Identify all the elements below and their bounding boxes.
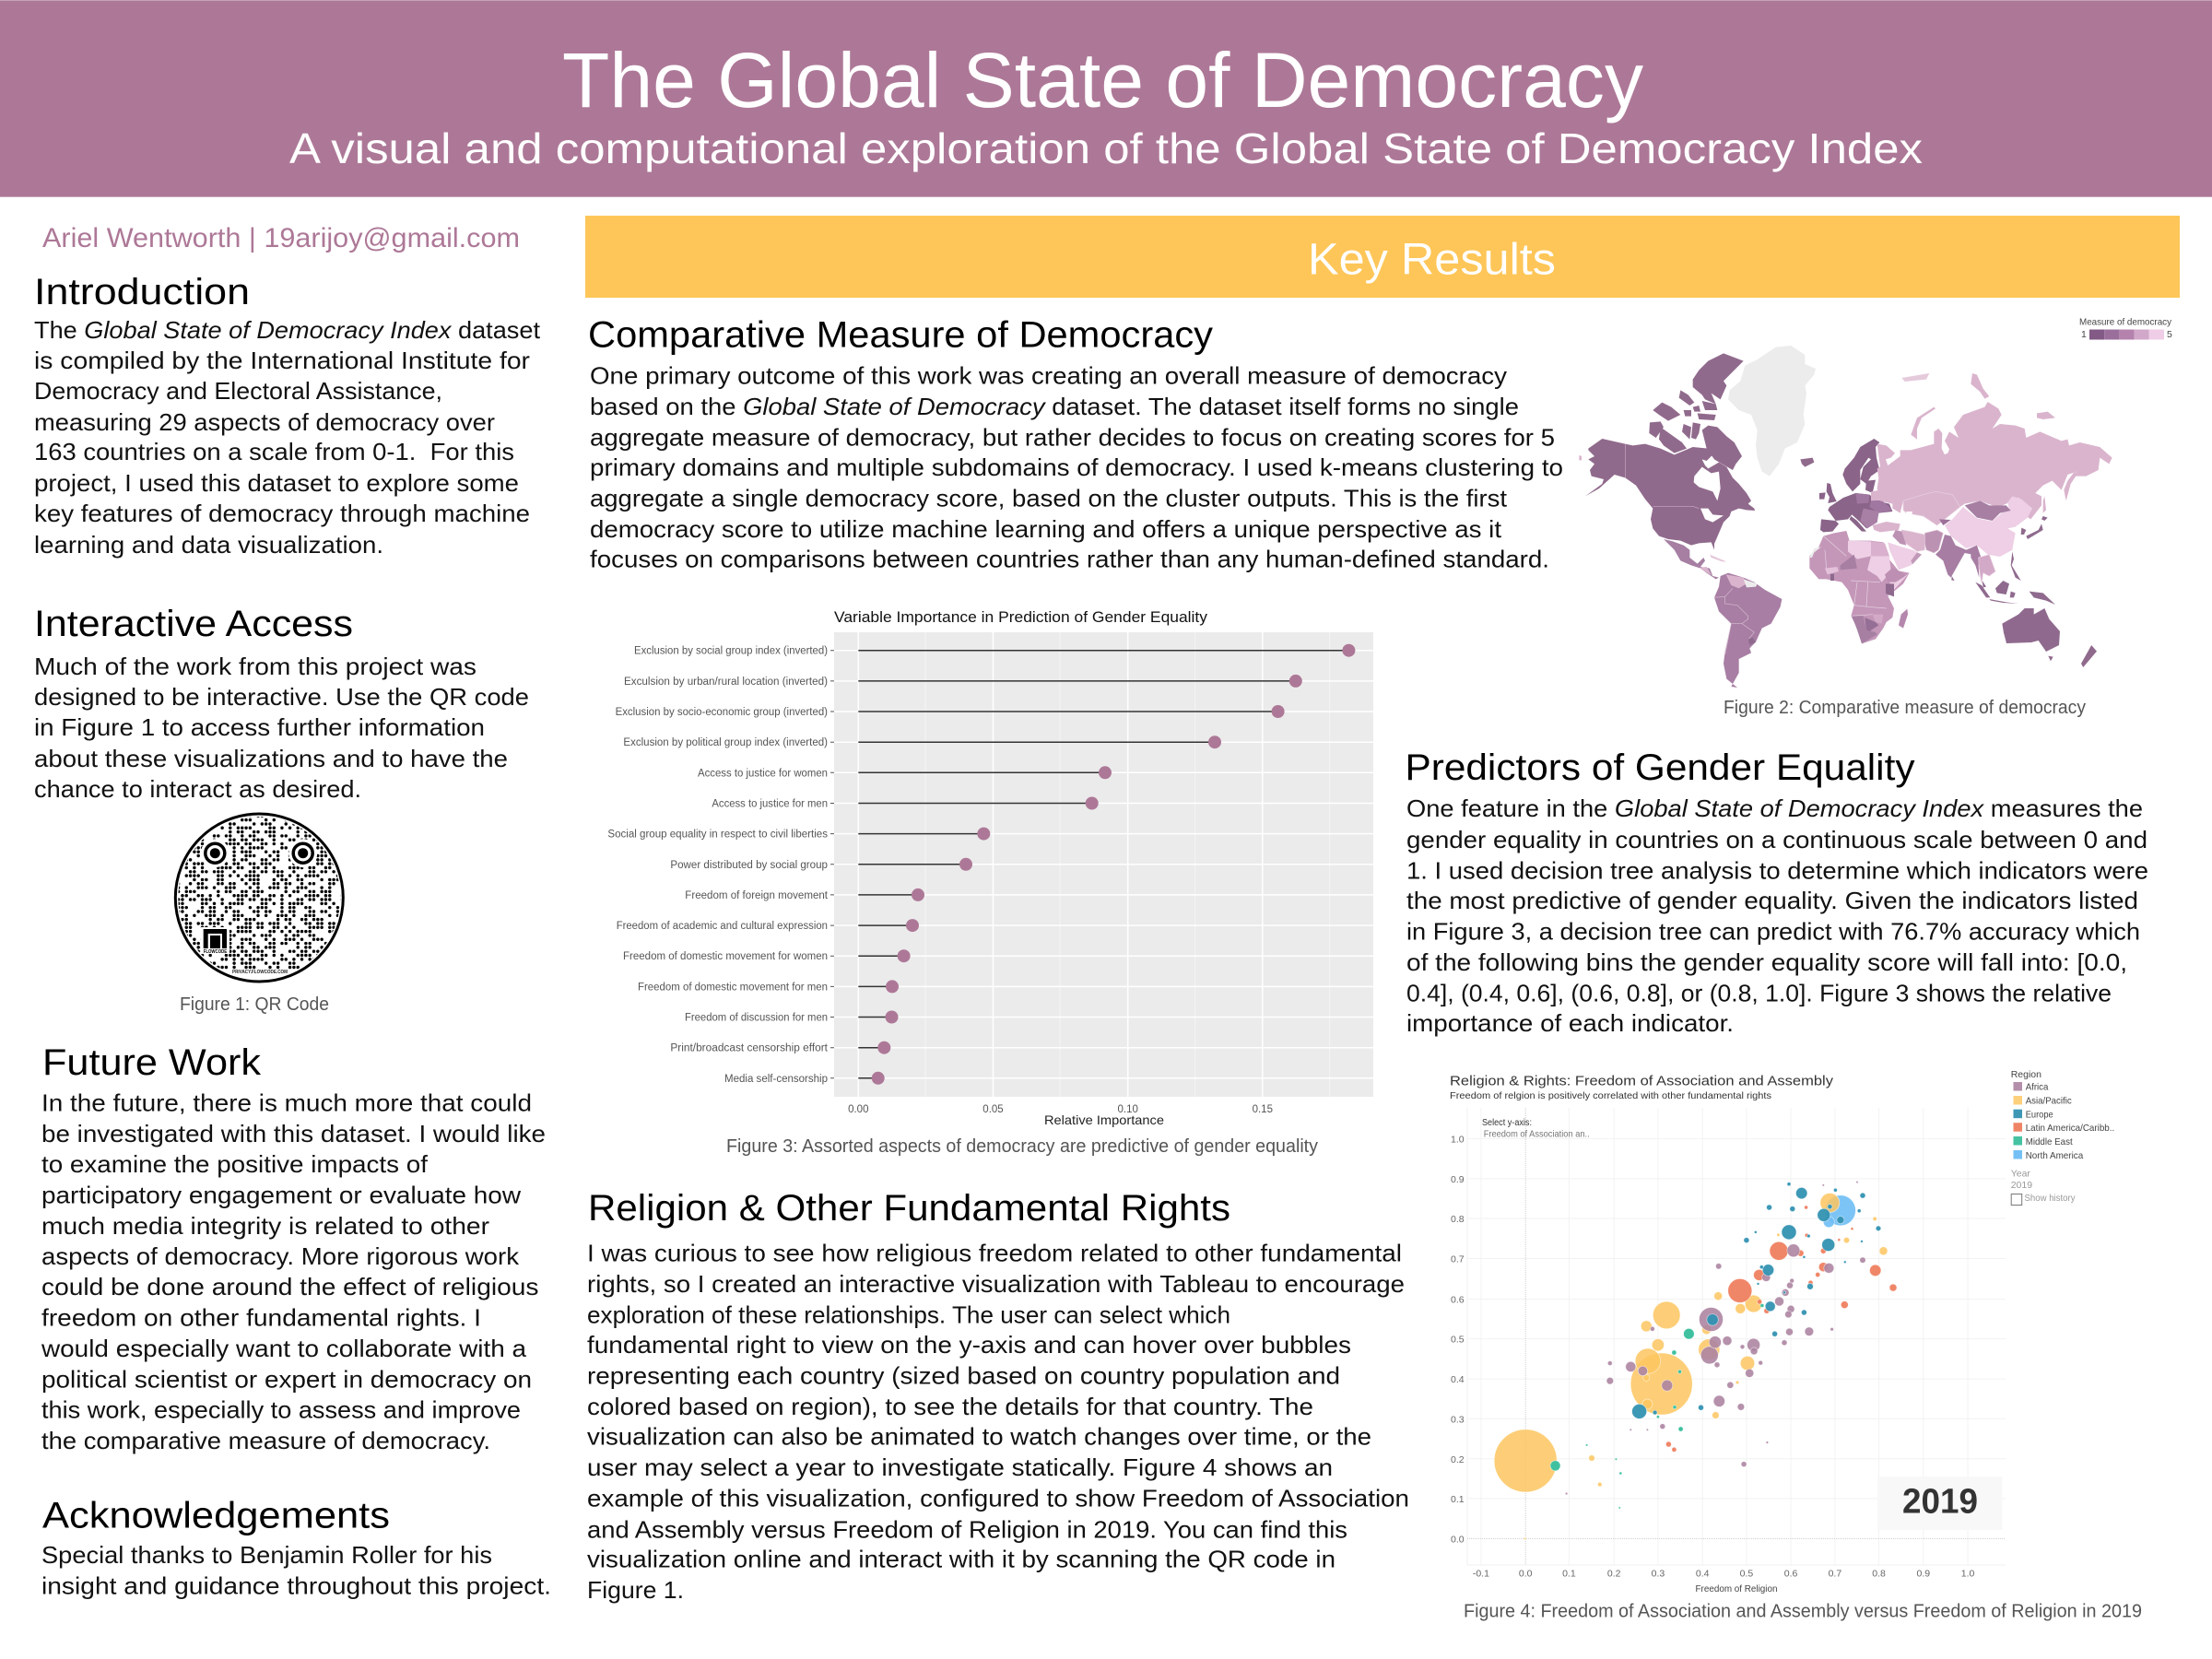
heading: future work: Future Work — [42, 1042, 262, 1083]
text block: religion: representing each country (sized based on country population and — [587, 1362, 1340, 1390]
text block: interactive access — [34, 653, 529, 803]
text block: predictors: importance of each indicator. — [1406, 1009, 1734, 1037]
text block: future work: In the future, there is much more that could — [41, 1089, 532, 1117]
y-axis selector: Freedom of Association an.. — [1484, 1130, 1590, 1139]
caption: figure 3: Figure 3: Assorted aspects of democracy are predictive of gender equality — [726, 1136, 1318, 1157]
text block: comparative measure: aggregate a single democracy score, based on the cluster outputs. This is the first — [590, 485, 1508, 512]
heading: key results: Key Results — [1308, 236, 1556, 284]
chart subtitle: Freedom of relgion is positively correlated with other fundamental rights — [1450, 1090, 1771, 1101]
caption: figure 1: Figure 1: QR Code — [180, 994, 329, 1015]
QR footer text: PRIVACY.FLOWCODE.COM — [232, 970, 288, 975]
text block: interactive access: in Figure 1 to access further information — [34, 713, 485, 741]
y axis labels: Print/broadcast censorship effort — [670, 1043, 829, 1054]
text block: future work — [41, 1089, 546, 1454]
y axis labels — [607, 646, 829, 1085]
text block: interactive access: Much of the work from this project was — [34, 653, 477, 680]
y axis labels: 0.6 — [1451, 1294, 1465, 1305]
year control: 2019 — [2011, 1180, 2032, 1191]
bubbles: europe — [1632, 1182, 1881, 1418]
text block: future work: this work, especially to assess and improve — [41, 1395, 521, 1423]
y axis labels: Freedom of foreign movement — [685, 890, 829, 901]
text block: acknowledgements: Special thanks to Benjamin Roller for his — [41, 1541, 492, 1569]
panel: religion and other fundamental rights — [587, 1188, 1409, 1604]
y axis labels: 0.9 — [1451, 1174, 1465, 1185]
text block: comparative measure: aggregate measure of democracy, but rather decides to focus on creating scores for 5 — [590, 424, 1555, 452]
bubbles: north america — [1823, 1195, 1855, 1228]
text block: religion: example of this visualization, configured to show Freedom of Association — [587, 1484, 1409, 1512]
europe — [1819, 439, 1900, 532]
text block: religion: fundamental right to view on the y-axis and can hover over bubbles — [587, 1331, 1351, 1359]
text block: predictors — [1406, 794, 2148, 1037]
text block: introduction: measuring 29 aspects of democracy over — [34, 408, 495, 436]
text block: introduction: project, I used this dataset to explore some — [34, 469, 519, 497]
x axis labels: 0.3 — [1652, 1569, 1665, 1580]
year watermark: 2019 — [1902, 1482, 1978, 1521]
legend: region: Asia/Pacific — [2026, 1095, 2072, 1106]
bubbles: latin america — [1665, 1206, 1897, 1452]
map: comparative measure of democracy — [1579, 346, 2112, 688]
text block: introduction — [34, 316, 541, 559]
text block: predictors: One feature in the Global State of Democracy Index measures the — [1406, 794, 2143, 822]
y axis labels: Access to justice for men — [712, 798, 828, 809]
text block: future work: political scientist or expert in democracy on — [41, 1366, 532, 1394]
x axis labels: 1.0 — [1961, 1569, 1975, 1580]
chart title: Variable Importance in Prediction of Gender Equality — [834, 609, 1208, 626]
icon: QR logo: FLOWCODE — [204, 949, 228, 955]
bubbles: asia pacific — [1494, 1193, 1888, 1540]
legend: region: Europe — [2026, 1110, 2053, 1121]
text block: religion: visualization online and interact with it by scanning the QR code in — [587, 1545, 1335, 1572]
y axis labels: 1.0 — [1451, 1134, 1465, 1145]
y-axis selector — [1482, 1118, 1590, 1139]
text block: religion: I was curious to see how religious freedom related to other fundamental — [587, 1239, 1402, 1266]
icon: QR eye right — [288, 839, 317, 867]
text block: religion: rights, so I created an interactive visualization with Tableau to encourage — [587, 1270, 1405, 1298]
y-axis selector: Select y-axis: — [1482, 1118, 1532, 1128]
text block: future work: could be done around the effect of religious — [41, 1273, 538, 1300]
x axis labels: 0.1 — [1562, 1569, 1576, 1580]
y axis labels — [1451, 1134, 1465, 1545]
map legend: Measure of democracy — [2079, 317, 2172, 328]
text block: comparative measure: primary domains and multiple subdomains of democracy. I used k-means clustering to — [590, 453, 1563, 481]
text block: future work: be investigated with this dataset. I would like — [41, 1120, 546, 1147]
text block: religion: user may select a year to investigate statically. Figure 4 shows an — [587, 1453, 1333, 1481]
y axis labels: 0.4 — [1451, 1374, 1465, 1385]
year control: Year — [2011, 1169, 2030, 1180]
y axis labels: Freedom of academic and cultural expression — [617, 921, 828, 932]
legend: region: Latin America/Caribb.. — [2026, 1123, 2114, 1134]
y axis labels: Freedom of domestic movement for women — [623, 951, 828, 962]
x axis labels — [848, 1104, 1273, 1115]
year control — [2011, 1169, 2076, 1206]
x axis title: Relative Importance — [1044, 1112, 1164, 1127]
text block: introduction: is compiled by the International Institute for — [34, 347, 530, 374]
subtitle: A visual and computational exploration of the Global State of Democracy Index — [289, 124, 1923, 172]
y axis labels: 0.2 — [1451, 1454, 1465, 1465]
icon: QR code — [174, 814, 347, 982]
text block: future work: the comparative measure of democracy. — [41, 1427, 490, 1454]
text block: future work: aspects of democracy. More rigorous work — [41, 1242, 520, 1270]
panel: future work — [41, 1042, 546, 1454]
x axis title: Freedom of Religion — [1696, 1583, 1778, 1594]
y axis labels: Exclusion by political group index (inverted) — [623, 737, 828, 748]
y axis labels: Access to justice for women — [698, 768, 828, 779]
x axis labels: 0.9 — [1916, 1569, 1930, 1580]
text block: predictors: 1. I used decision tree analysis to determine which indicators were — [1406, 857, 2148, 885]
text block: predictors: of the following bins the gender equality score will fall into: [0.0, — [1406, 948, 2127, 976]
x axis labels: 0.15 — [1253, 1104, 1273, 1115]
x axis labels: 0.5 — [1740, 1569, 1753, 1580]
heading: comparative measure: Comparative Measure of Democracy — [588, 315, 1213, 356]
y axis labels: Exclusion by social group index (inverted) — [634, 646, 828, 657]
heading: religion: Religion & Other Fundamental Rights — [588, 1188, 1230, 1229]
text block: comparative measure: democracy score to utilize machine learning and offers a unique perspective as it — [590, 515, 1502, 543]
text block: introduction: key features of democracy through machine — [34, 500, 530, 527]
year control: Show history — [2024, 1193, 2076, 1204]
key results banner — [585, 216, 2180, 298]
asia and russia — [1877, 373, 2112, 652]
text block: religion — [587, 1239, 1409, 1604]
x axis labels: 0.7 — [1829, 1569, 1841, 1580]
x axis labels: 0.2 — [1607, 1569, 1621, 1580]
text block: predictors: 0.4], (0.4, 0.6], (0.6, 0.8], or (0.8, 1.0]. Figure 3 shows the relative — [1406, 979, 2112, 1006]
panel: introduction — [34, 272, 541, 559]
chart: bubble scatter freedom of association vs religion — [1450, 1069, 2114, 1594]
text block: acknowledgements — [41, 1541, 551, 1600]
legend: region: Africa — [2026, 1082, 2049, 1093]
y axis labels: Media self-censorship — [724, 1074, 828, 1085]
greenland and north america — [1579, 346, 1816, 550]
bubbles: africa — [1565, 1181, 1865, 1495]
map legend — [2079, 317, 2172, 340]
x axis labels: 0.0 — [1519, 1569, 1533, 1580]
caption: figure 4: Figure 4: Freedom of Association and Assembly versus Freedom of Religion in 2019 — [1464, 1602, 2142, 1622]
text block: comparative measure — [590, 361, 1563, 573]
text block: comparative measure: focuses on comparisons between countries rather than any human-defined standard. — [590, 546, 1549, 573]
heading: introduction: Introduction — [34, 272, 250, 312]
text block: introduction: 163 countries on a scale from 0-1. For this — [34, 438, 514, 465]
legend: region: Region — [2011, 1069, 2041, 1080]
text block: comparative measure: One primary outcome of this work was creating an overall measure of democracy — [590, 361, 1507, 389]
text block: introduction: The Global State of Democracy Index dataset — [34, 316, 541, 344]
text block: religion: and Assembly versus Freedom of Religion in 2019. You can find this — [587, 1515, 1347, 1543]
y axis labels: 0.0 — [1451, 1534, 1465, 1545]
icon: QR eye left — [201, 839, 229, 867]
y axis labels: 0.3 — [1451, 1414, 1465, 1425]
text block: religion: visualization can also be animated to watch changes over time, or the — [587, 1423, 1371, 1451]
text block: introduction: learning and data visualization. — [34, 531, 383, 559]
y axis labels: 0.1 — [1451, 1494, 1465, 1505]
text block: religion: exploration of these relationships. The user can select which — [587, 1301, 1230, 1329]
icon: QR logo — [201, 927, 229, 955]
text block: future work: would especially want to collaborate with a — [41, 1335, 527, 1362]
y axis labels: Power distributed by social group — [670, 860, 828, 871]
x axis labels: 0.4 — [1696, 1569, 1710, 1580]
panel: comparative measure — [588, 315, 1563, 573]
x axis labels: -0.1 — [1473, 1569, 1489, 1580]
text block: future work: much media integrity is related to other — [41, 1212, 489, 1240]
text block: predictors: in Figure 3, a decision tree can predict with 76.7% accuracy which — [1406, 918, 2140, 946]
heading: interactive access: Interactive Access — [34, 604, 353, 644]
chart title: Religion & Rights: Freedom of Association and Assembly — [1450, 1075, 1834, 1089]
text block: interactive access: about these visualizations and to have the — [34, 745, 508, 772]
author line: Ariel Wentworth | 19arijoy@gmail.com — [42, 223, 520, 253]
text block: interactive access: chance to interact as desired. — [34, 775, 361, 803]
header banner — [0, 0, 2212, 197]
chart: variable importance lollipop — [607, 609, 1373, 1127]
y axis tick marks — [830, 651, 834, 1078]
heading: predictors: Predictors of Gender Equality — [1405, 747, 1915, 788]
text block: future work: to examine the positive impacts of — [41, 1150, 429, 1178]
legend: region: Middle East — [2026, 1136, 2073, 1147]
panel: predictors of gender equality — [1405, 747, 2148, 1037]
y axis labels: Exculsion by urban/rural location (inverted) — [624, 677, 828, 688]
text block: predictors: gender equality in countries on a continuous scale between 0 and — [1406, 826, 2147, 853]
text block: predictors: the most predictive of gender equality. Given the indicators listed — [1406, 887, 2138, 914]
caption: figure 2: Figure 2: Comparative measure of democracy — [1724, 698, 2086, 718]
text block: introduction: Democracy and Electoral Assistance, — [34, 377, 442, 405]
x axis labels: 0.05 — [982, 1104, 1004, 1115]
x axis labels: 0.6 — [1784, 1569, 1798, 1580]
text block: interactive access: designed to be interactive. Use the QR code — [34, 683, 529, 711]
x axis labels: 0.8 — [1872, 1569, 1886, 1580]
panel: acknowledgements — [41, 1495, 551, 1600]
heading: acknowledgements: Acknowledgements — [42, 1495, 390, 1535]
text block: comparative measure: based on the Global State of Democracy dataset. The dataset itself forms no single — [590, 393, 1519, 420]
legend: region: North America — [2026, 1150, 2083, 1161]
map legend: 1 — [2081, 329, 2087, 340]
x axis labels: 0.10 — [1118, 1104, 1138, 1115]
oceania islands — [2048, 645, 2097, 667]
text block: religion: Figure 1. — [587, 1576, 684, 1604]
x axis labels: 0.00 — [848, 1104, 868, 1115]
y axis labels: Social group equality in respect to civil liberties — [607, 830, 828, 841]
bubbles: middle east — [1550, 1303, 1764, 1509]
y axis labels: Freedom of discussion for men — [685, 1012, 828, 1023]
text block: future work: freedom on other fundamental rights. I — [41, 1303, 481, 1331]
y axis labels: 0.5 — [1451, 1335, 1465, 1346]
map legend: 5 — [2167, 329, 2172, 340]
africa — [1809, 531, 1910, 643]
lollipop stems — [858, 651, 1348, 1078]
text block: future work: participatory engagement or evaluate how — [41, 1182, 521, 1209]
text block: religion: colored based on region), to see the details for that country. The — [587, 1393, 1313, 1420]
y axis labels: 0.8 — [1451, 1214, 1465, 1225]
title: The Global State of Democracy — [562, 37, 1643, 124]
legend: region — [2011, 1069, 2114, 1161]
text block: acknowledgements: insight and guidance throughout this project. — [41, 1572, 551, 1600]
y axis labels: Exclusion by socio-economic group (inverted) — [616, 707, 828, 718]
latin america — [1664, 539, 1782, 688]
y axis labels: 0.7 — [1451, 1253, 1465, 1265]
lollipop dots — [872, 644, 1355, 1085]
y axis labels: Freedom of domestic movement for men — [638, 982, 828, 993]
gridlines — [1467, 1108, 2006, 1565]
x axis labels — [1473, 1569, 1975, 1580]
year watermark — [1877, 1477, 2002, 1530]
